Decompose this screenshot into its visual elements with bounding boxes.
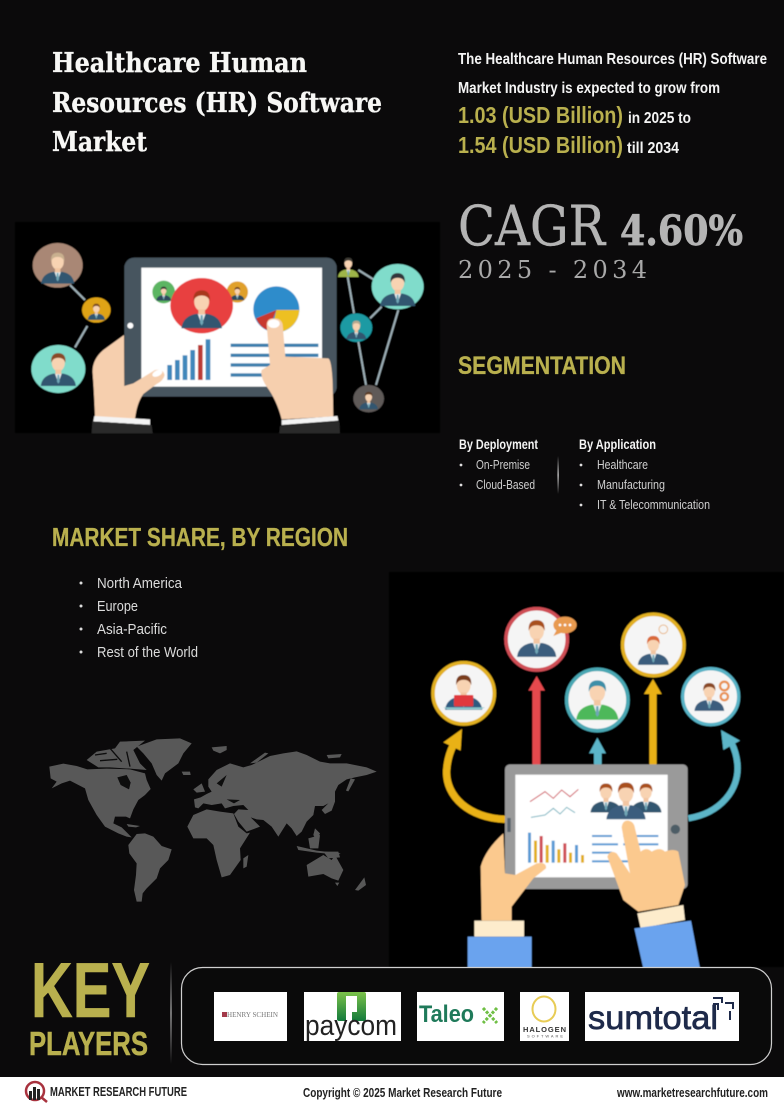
logo: Halogen: SOFTWARE xyxy=(527,1034,563,1038)
CAGR callout: 2025 - 2034 xyxy=(458,256,647,284)
title xyxy=(52,48,382,158)
CAGR callout: CAGR xyxy=(458,194,606,258)
logo: SumTotal xyxy=(585,992,739,1041)
icon: left hand xyxy=(468,833,546,968)
heading: segmentation: SEGMENTATION xyxy=(458,352,626,380)
panel: HR workflow illustration xyxy=(389,572,784,968)
connector lines xyxy=(70,270,398,385)
logo: Paycom: paycom xyxy=(305,1010,397,1042)
list lines xyxy=(231,344,318,377)
logo: Henry Schein xyxy=(214,992,287,1041)
icon: tablet with dashboard xyxy=(505,764,688,889)
icon: right hand xyxy=(261,318,340,433)
bar chart xyxy=(167,339,210,380)
region list: Rest of the World xyxy=(97,644,198,661)
footer xyxy=(0,1077,784,1108)
logo: Paycom xyxy=(304,992,401,1042)
logo: SumTotal: sumtotal xyxy=(588,999,718,1036)
title: Market xyxy=(52,127,147,158)
region list: Asia-Pacific xyxy=(97,621,167,638)
pie chart xyxy=(253,286,299,332)
market growth summary: till 2034 xyxy=(627,140,679,157)
segmentation: by application xyxy=(579,436,710,512)
segmentation: by application: Manufacturing xyxy=(597,478,665,492)
CAGR callout: 4.60% xyxy=(620,207,743,255)
key players panel xyxy=(182,968,772,1064)
line charts xyxy=(530,789,578,802)
world map xyxy=(49,738,377,902)
logo: Halogen: HALOGEN xyxy=(523,1025,566,1034)
people circles xyxy=(433,609,739,731)
logo: Taleo xyxy=(417,992,504,1041)
title: Healthcare Human xyxy=(52,48,307,79)
footer: Copyright © 2025 Market Research Future xyxy=(303,1085,502,1100)
bars xyxy=(528,833,584,863)
logo: Henry Schein: HENRY SCHEIN xyxy=(227,1010,279,1019)
title: Resources (HR) Software xyxy=(52,88,382,119)
icon: left hand xyxy=(92,335,165,433)
arrows xyxy=(443,676,740,819)
market growth summary: Market Industry is expected to grow from xyxy=(458,80,720,97)
heading: market share by region: MARKET SHARE, BY REGION xyxy=(52,522,348,552)
region list xyxy=(80,575,198,661)
segmentation: by deployment xyxy=(459,436,538,492)
panel: people network illustration xyxy=(15,222,440,433)
market growth summary xyxy=(458,51,767,158)
logo: Halogen xyxy=(520,992,569,1041)
region list: Europe xyxy=(97,598,138,615)
icon: right people xyxy=(338,258,424,412)
logo: Taleo: Taleo xyxy=(419,1001,474,1028)
region list: North America xyxy=(97,575,183,592)
segmentation: by deployment: By Deployment xyxy=(459,436,538,452)
segmentation: by application: Healthcare xyxy=(597,458,648,472)
icon: left people xyxy=(31,243,111,393)
key players heading xyxy=(29,946,150,1062)
team xyxy=(590,783,621,812)
footer: MARKET RESEARCH FUTURE xyxy=(50,1084,187,1099)
segmentation: by deployment: On-Premise xyxy=(476,458,530,472)
market growth summary: 1.03 (USD Billion) xyxy=(458,102,623,128)
key players heading: PLAYERS xyxy=(29,1025,148,1062)
market growth summary: in 2025 to xyxy=(628,110,691,127)
icon: tablet xyxy=(124,258,337,397)
segmentation: by deployment: Cloud-Based xyxy=(476,478,535,492)
market growth summary: 1.54 (USD Billion) xyxy=(458,132,623,158)
segmentation: by application: IT & Telecommunication xyxy=(597,498,710,512)
CAGR callout xyxy=(458,194,743,284)
segmentation: by application: By Application xyxy=(579,436,656,452)
icon: right hand xyxy=(607,821,700,968)
key players heading: KEY xyxy=(31,946,150,1034)
icon: Market Research Future logo xyxy=(26,1082,47,1102)
list xyxy=(592,835,658,862)
